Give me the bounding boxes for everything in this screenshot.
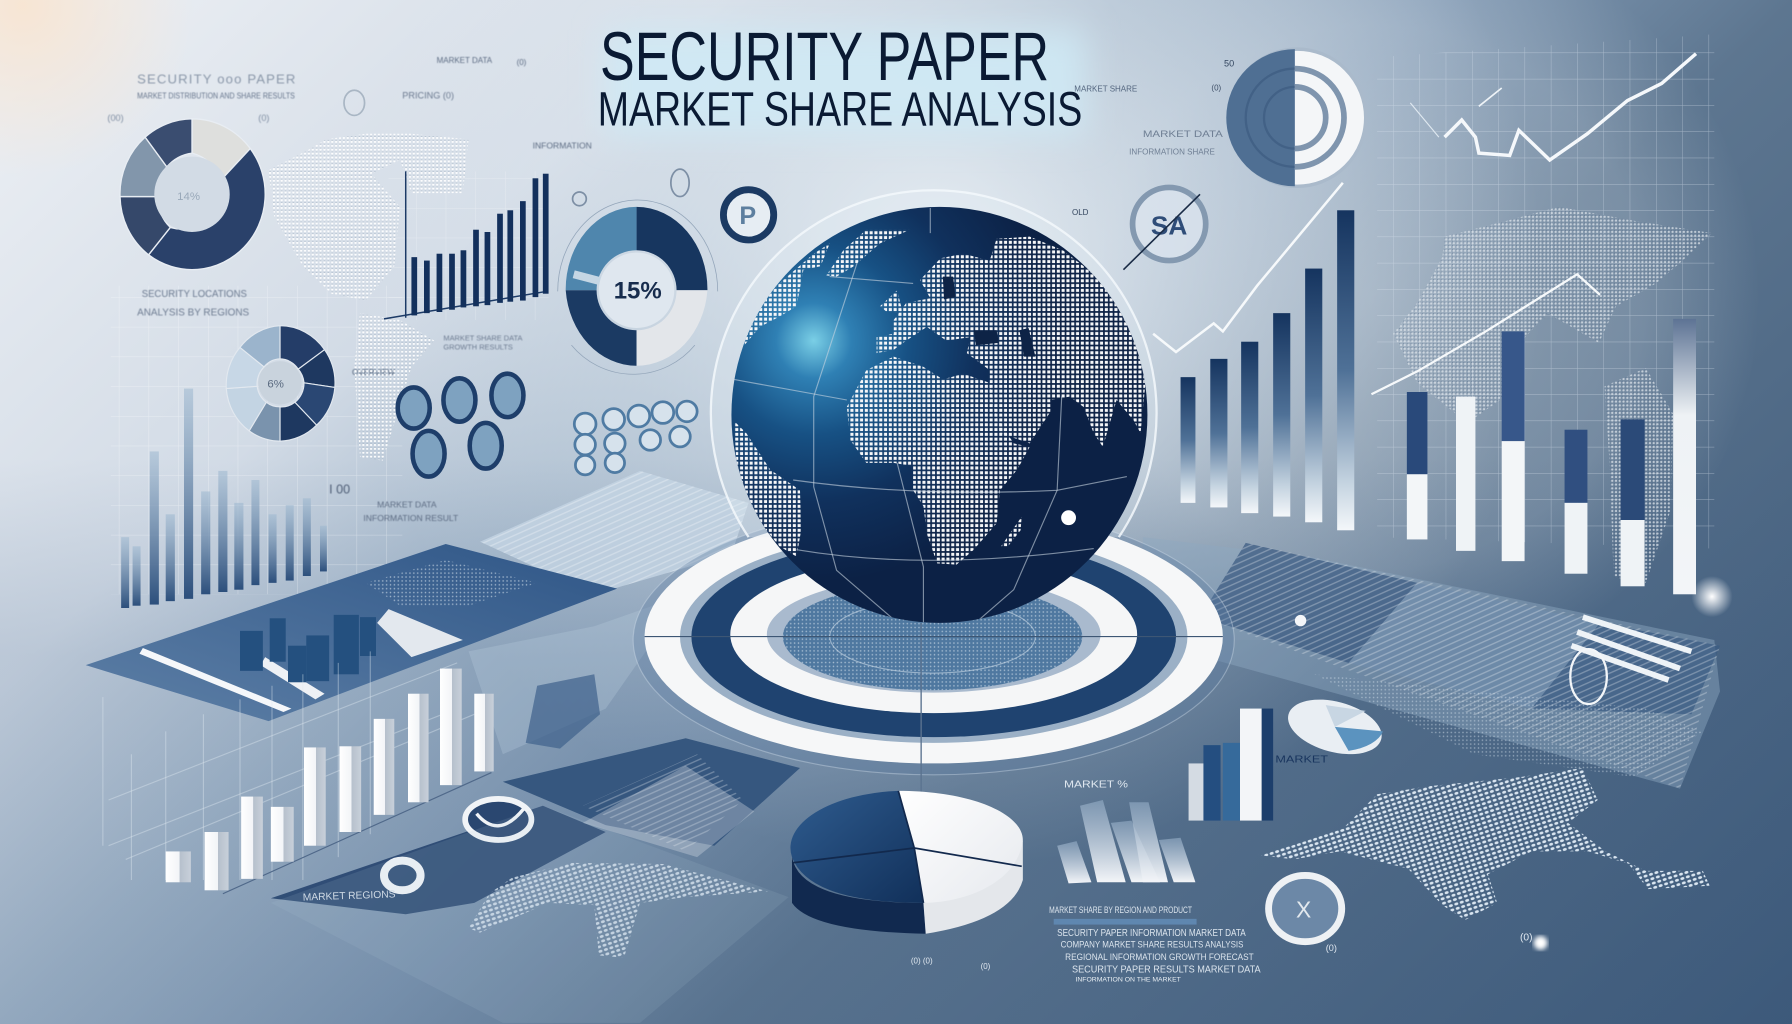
- light flare: lower right: [1534, 936, 1547, 950]
- floor sheets right: [1143, 537, 1720, 789]
- chart: small pie disc: [1282, 690, 1388, 764]
- donut chart: segmented lower left: [226, 326, 335, 441]
- bar chart: navy growth bars: [384, 171, 549, 320]
- text block: bottom table: MARKET SHARE BY REGION AND PRODUCT: [1049, 905, 1192, 915]
- title: MARKET SHARE ANALYSIS: [598, 84, 1082, 137]
- icons: small ring grid: [574, 401, 697, 475]
- icon: ring with x: [1269, 875, 1342, 942]
- icon: P badge: [723, 190, 774, 240]
- donut chart: segmented lower left: 6%: [267, 378, 284, 390]
- panel: right text caption: (0): [1211, 83, 1222, 92]
- line chart: upper right zigzag: [1410, 54, 1696, 160]
- dotted map: lower centre: [469, 863, 768, 958]
- globe halo ring: [711, 190, 1157, 537]
- text block: bottom table: REGIONAL INFORMATION GROWTH FORECAST: [1065, 952, 1254, 962]
- floor panel: dark sheet with ring icons: [271, 738, 800, 914]
- small labels: lower right: (0): [1520, 933, 1533, 944]
- icons: shield row: [398, 374, 523, 477]
- panel: security paper caption: MARKET DISTRIBUTION AND SHARE RESULTS: [137, 90, 295, 100]
- dotted map: lower right: [1257, 768, 1710, 920]
- right wall trend line: [1371, 274, 1600, 394]
- panel: security paper caption: MARKET DATA: [377, 499, 437, 509]
- panel: security paper caption: INFORMATION: [533, 141, 592, 151]
- globe: [731, 207, 1147, 623]
- panel: security paper caption: GROWTH RESULTS: [443, 343, 513, 352]
- right bar chart: six rising bars: [1181, 210, 1354, 530]
- caption: small chart labels: [1064, 754, 1329, 790]
- panel: security paper caption: MARKET SHARE DATA: [443, 334, 522, 343]
- small labels: lower right: (0): [981, 962, 991, 971]
- small labels: lower right: [911, 933, 1533, 971]
- floor panel: pale map sheet: [271, 806, 789, 1023]
- pie chart: 3D quarters: [790, 791, 1023, 934]
- caption: small chart labels: MARKET %: [1064, 779, 1128, 790]
- panel: security paper caption: SECURITY ooo PAPER: [137, 71, 297, 86]
- panel: security paper caption: (0): [258, 113, 269, 123]
- text block: bottom table: SECURITY PAPER INFORMATION MARKET DATA: [1057, 928, 1246, 939]
- donut chart: top left: 14%: [177, 191, 200, 203]
- bar chart: pale falling bars: [1057, 800, 1195, 883]
- panel: right text caption: [1072, 58, 1234, 217]
- caption: small chart labels: MARKET: [1275, 754, 1329, 765]
- icon: target half disc: [1226, 49, 1366, 186]
- title line 1: SECURITY PAPER: [600, 18, 1049, 95]
- floor panel: middle sheet behind white bars: [469, 594, 686, 754]
- bar chart: small 3D trio: [1189, 709, 1273, 821]
- panel: security paper caption: I 00: [329, 483, 350, 497]
- pedestal rings: [633, 505, 1234, 869]
- panel: right text caption: OLD: [1072, 208, 1089, 217]
- donut chart: top left: [120, 119, 265, 270]
- small labels: lower right: (0) (0): [911, 956, 933, 965]
- panel: right text caption: 50: [1224, 58, 1234, 68]
- panel: security paper caption: (00): [107, 113, 124, 123]
- right bar chart: navy and white bars: [1407, 319, 1696, 594]
- panel: security paper caption: (0): [517, 58, 527, 67]
- icon: white ring: [465, 799, 531, 840]
- icon: P badge: P: [739, 202, 756, 230]
- panel: right text caption: MARKET SHARE: [1074, 84, 1137, 93]
- line: rising white trend arrow: [1153, 183, 1343, 352]
- donut chart: 15 percent: [558, 200, 718, 374]
- floor panel: pale textured sheet: [480, 471, 749, 594]
- panel: security paper caption: OVERVIEW: [352, 368, 395, 377]
- text block: bottom table: SECURITY PAPER RESULTS MARKET DATA: [1072, 965, 1261, 976]
- text block: bottom table: INFORMATION ON THE MARKET: [1075, 977, 1182, 984]
- panel: security paper caption: ANALYSIS BY REGIONS: [137, 307, 250, 318]
- small labels: lower right: (0): [1326, 943, 1337, 953]
- text block: bottom table: COMPANY MARKET SHARE RESULTS ANALYSIS: [1061, 939, 1243, 949]
- icon: six ring: [384, 861, 421, 890]
- light flare: right: [1691, 576, 1733, 617]
- icon: SA ring: [1123, 187, 1206, 270]
- wall grid: upper right: [1377, 34, 1714, 549]
- icon: small ring badges: [344, 90, 689, 206]
- donut chart: 15 percent: 15%: [614, 277, 662, 304]
- panel: right text caption: INFORMATION SHARE: [1129, 147, 1215, 156]
- icon: ring with x: X: [1296, 897, 1311, 923]
- panel: right text caption: MARKET DATA: [1143, 129, 1224, 139]
- dotted world map: right wall: [1393, 207, 1712, 583]
- globe continents: [734, 230, 1145, 565]
- panel: security paper caption: PRICING (0): [402, 90, 454, 100]
- title: [598, 18, 1086, 137]
- dotted world map: americas: [269, 134, 469, 461]
- panel: security paper caption: [107, 56, 592, 523]
- bar chart: translucent left wall bars: [121, 389, 327, 608]
- panel: security paper caption: MARKET DATA: [437, 56, 493, 65]
- panel: security paper caption: INFORMATION RESULT: [363, 513, 459, 523]
- panel: security paper caption: SECURITY LOCATIONS: [142, 289, 247, 300]
- left wall grid: [111, 286, 402, 594]
- floor panel: dark map sheet with 3D bars: [86, 544, 617, 721]
- floor panel: sheet hatch: [480, 471, 749, 594]
- bar chart: white floor bars: [103, 651, 494, 894]
- icon: SA ring: SA: [1151, 210, 1187, 240]
- text block: bottom table: [1049, 905, 1261, 984]
- floor panel: dark sheet with ring icons: MARKET REGIONS: [303, 889, 396, 904]
